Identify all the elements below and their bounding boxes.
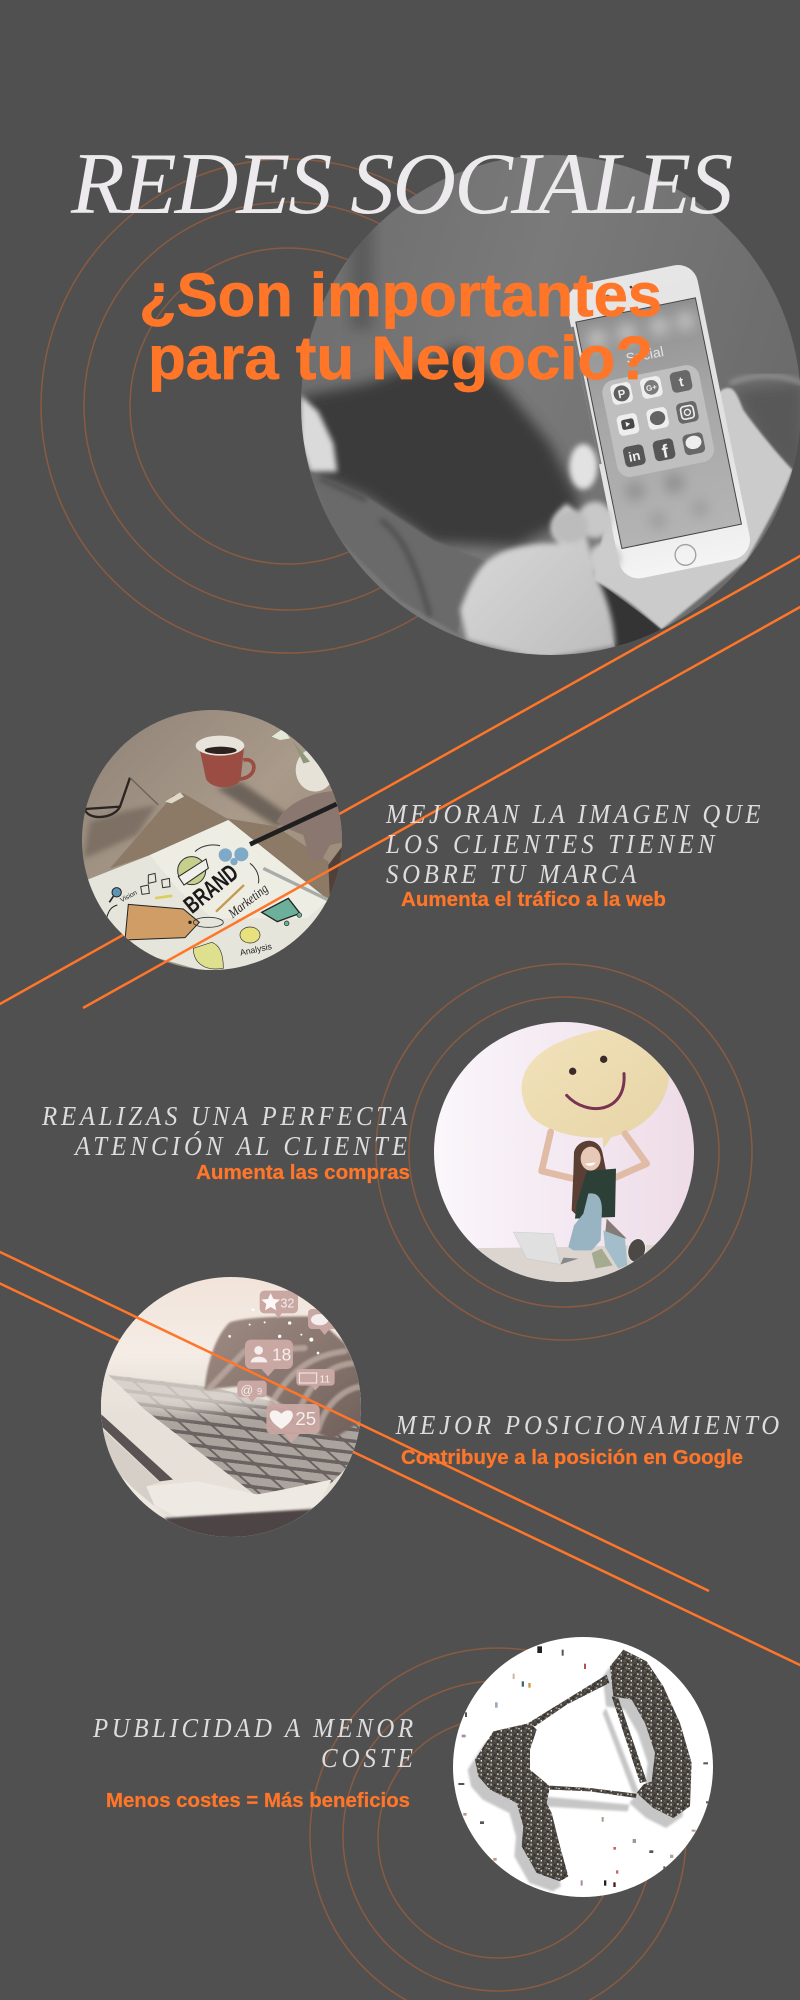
app icons: in [627,448,642,465]
text block: publicidad a menor coste: COSTE [321,1743,413,1773]
text block: mejoran la imagen: Aumenta el tráfico a la web [401,888,666,911]
app icons: G+ [645,382,658,393]
text block: publicidad a menor coste: PUBLICIDAD A MENOR [92,1713,413,1743]
subtitle [139,261,662,392]
phone [563,261,754,582]
kraft paper [110,793,333,902]
text block: atencion al cliente: ATENCIÓN AL CLIENTE [73,1131,407,1161]
laptop deck [98,1373,368,1520]
notification badges: @ [240,1384,253,1398]
photo: brand marketing notebook [80,705,350,975]
dark shoulder [300,347,580,547]
rings: bottom concentric circles [310,1648,686,2000]
front edge [98,1411,173,1481]
line: second group lower diagonal, behind laptop photo [0,1282,800,1666]
hero photo: hand holding phone [300,150,800,663]
cup [196,736,254,787]
doodles: Analysis [239,941,273,958]
speech bubble [522,1030,669,1149]
text block: mejoran la imagen: SOBRE TU MARCA [386,859,636,889]
text block: mejor posicionamiento: MEJOR POSICIONAMIENTO [395,1410,779,1440]
sparkles [228,1308,319,1354]
text block: atencion al cliente: REALIZAS UNA PERFECTA [41,1101,407,1131]
gap between hands [597,582,662,646]
scattered people [458,1646,710,1887]
text block: publicidad a menor coste [92,1713,413,1812]
woman [513,1132,648,1269]
glasses [85,778,158,817]
notification badges: 25 [295,1408,316,1429]
app icons: P [617,388,627,401]
front hand [460,503,615,660]
text block: mejor posicionamiento: Contribuye a la posición en Google [401,1446,743,1469]
text block: mejor posicionamiento [395,1410,779,1469]
phone: Social [624,343,665,366]
text block: mejoran la imagen [385,799,761,911]
notification badges: 18 [272,1344,291,1364]
line: second group upper diagonal, over laptop photo [0,1251,709,1591]
hands [205,1316,365,1440]
text block: publicidad a menor coste: Menos costes = Más beneficios [106,1789,410,1812]
notification badges: 32 [280,1296,294,1310]
app icons [609,369,706,470]
photo: woman with smiley bubble [430,1017,700,1287]
photo: megaphone made of a crowd [450,1633,720,1903]
white sleeve patch [300,395,337,472]
title: REDES SOCIALES [70,136,732,233]
app icons: t [677,374,685,390]
doodles: Marketing [225,880,271,921]
text block: mejoran la imagen: LOS CLIENTES TIENEN [385,829,716,859]
line: upper diagonal, behind brand photo [0,555,800,1005]
dark right edge [328,847,342,896]
rings: top left concentric circles [41,159,535,653]
fingers on phone [552,444,622,576]
rings: around smiley photo [376,964,752,1340]
doodles [107,845,302,969]
holding hand [593,388,793,629]
megaphone [475,1650,692,1881]
text block: mejoran la imagen: MEJORAN LA IMAGEN QUE [385,799,761,829]
hand with pen [277,791,347,860]
notebook [87,820,328,973]
doodles: Vision [119,889,139,904]
notification badges: 11 [320,1374,330,1385]
app icons: f [660,440,671,462]
line: lower diagonal, over brand photo [83,606,800,1008]
notification badges [237,1291,338,1443]
sleeve [308,471,487,633]
text block: atencion al cliente [41,1101,410,1184]
text block: atencion al cliente: Aumenta las compras [196,1161,410,1184]
subtitle: ¿Son importantes [139,261,662,329]
crowd shadow [468,1660,684,1891]
vase [296,750,330,792]
notification badges: 9 [257,1387,262,1397]
photo: laptop with social notifications [98,1273,368,1543]
doodles: BRAND [179,859,244,919]
subtitle: para tu Negocio? [148,324,653,392]
